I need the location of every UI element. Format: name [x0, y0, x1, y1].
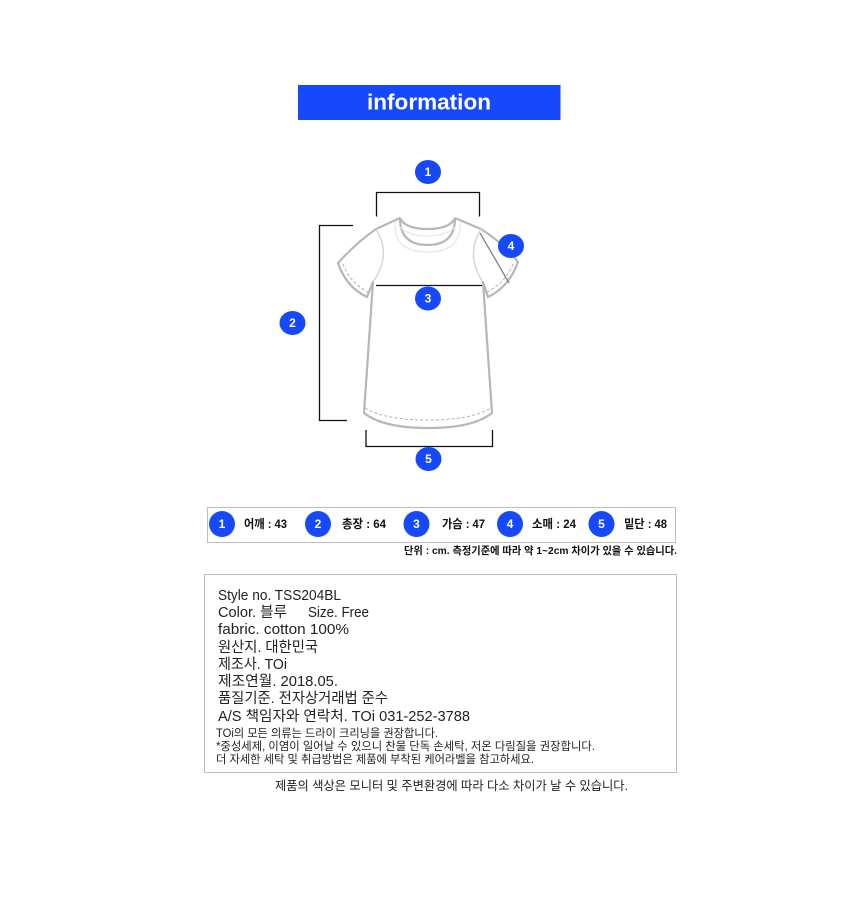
title banner: [298, 85, 560, 120]
measure 4: sleeve line: [480, 233, 509, 283]
legend: length: 총장 : 64: [342, 517, 386, 531]
style number: Style no. TSS204BL: [218, 588, 341, 604]
badge 1: [415, 160, 441, 184]
product info panel: [204, 574, 676, 772]
legend: chest: 가슴 : 47: [442, 516, 485, 531]
legend: chest: [404, 511, 485, 537]
legend: hem: [588, 511, 667, 537]
badge 3: [415, 286, 441, 310]
badge 5: [416, 447, 442, 471]
legend: hem: 5: [598, 517, 605, 531]
color and size: [218, 604, 369, 621]
badge 4: 4: [508, 239, 515, 253]
unit note: 단위 : cm. 측정기준에 따라 약 1~2cm 차이가 있을 수 있습니다.: [404, 544, 677, 557]
legend: shoulder: 어깨 : 43: [244, 517, 287, 531]
measure 1: shoulder bracket: [376, 192, 480, 216]
manufacturer: 제조사. TOi: [218, 656, 287, 673]
size legend panel: [208, 508, 676, 542]
origin: 원산지. 대한민국: [218, 639, 318, 656]
legend: length: [305, 511, 386, 537]
care note 1: TOi의 모든 의류는 드라이 크리닝을 권장합니다.: [216, 727, 438, 740]
badge 3: 3: [425, 292, 432, 306]
fabric: fabric. cotton 100%: [218, 622, 349, 638]
measure 5: hem bracket: [366, 430, 492, 446]
legend: sleeve: 소매 : 24: [532, 516, 576, 531]
color disclaimer: 제품의 색상은 모니터 및 주변환경에 따라 다소 차이가 날 수 있습니다.: [275, 779, 628, 793]
measure 3: chest line: [376, 284, 482, 286]
care note 3: 더 자세한 세탁 및 취급방법은 제품에 부착된 케어라벨을 참고하세요.: [216, 752, 534, 766]
legend: chest: 3: [413, 517, 420, 531]
legend: length: 2: [315, 517, 322, 531]
after-sales contact: A/S 책임자와 연락처. TOi 031-252-3788: [218, 708, 470, 725]
badge 5: 5: [425, 452, 432, 466]
color and size: Size. Free: [308, 605, 369, 621]
measurement diagram: [280, 160, 524, 471]
legend: shoulder: 1: [219, 517, 226, 531]
measure 2: length bracket: [320, 226, 353, 420]
badge 1: 1: [425, 165, 432, 179]
care note 2: *중성세제, 이염이 일어날 수 있으니 찬물 단독 손세탁, 저온 다림질을 권장합니다.: [216, 739, 595, 753]
legend: hem: 밑단 : 48: [624, 517, 667, 531]
legend: shoulder: [209, 511, 287, 537]
manufacture date: 제조연월. 2018.05.: [218, 673, 338, 690]
badge 2: [280, 311, 306, 335]
color and size: Color. 블루: [218, 604, 287, 621]
legend: sleeve: [497, 511, 576, 537]
quality standard: 품질기준. 전자상거래법 준수: [218, 690, 388, 707]
title banner: information: [367, 90, 491, 114]
badge 2: 2: [289, 316, 296, 330]
legend: sleeve: 4: [507, 517, 514, 531]
badge 4: [498, 234, 524, 258]
t-shirt outline: [338, 218, 518, 428]
